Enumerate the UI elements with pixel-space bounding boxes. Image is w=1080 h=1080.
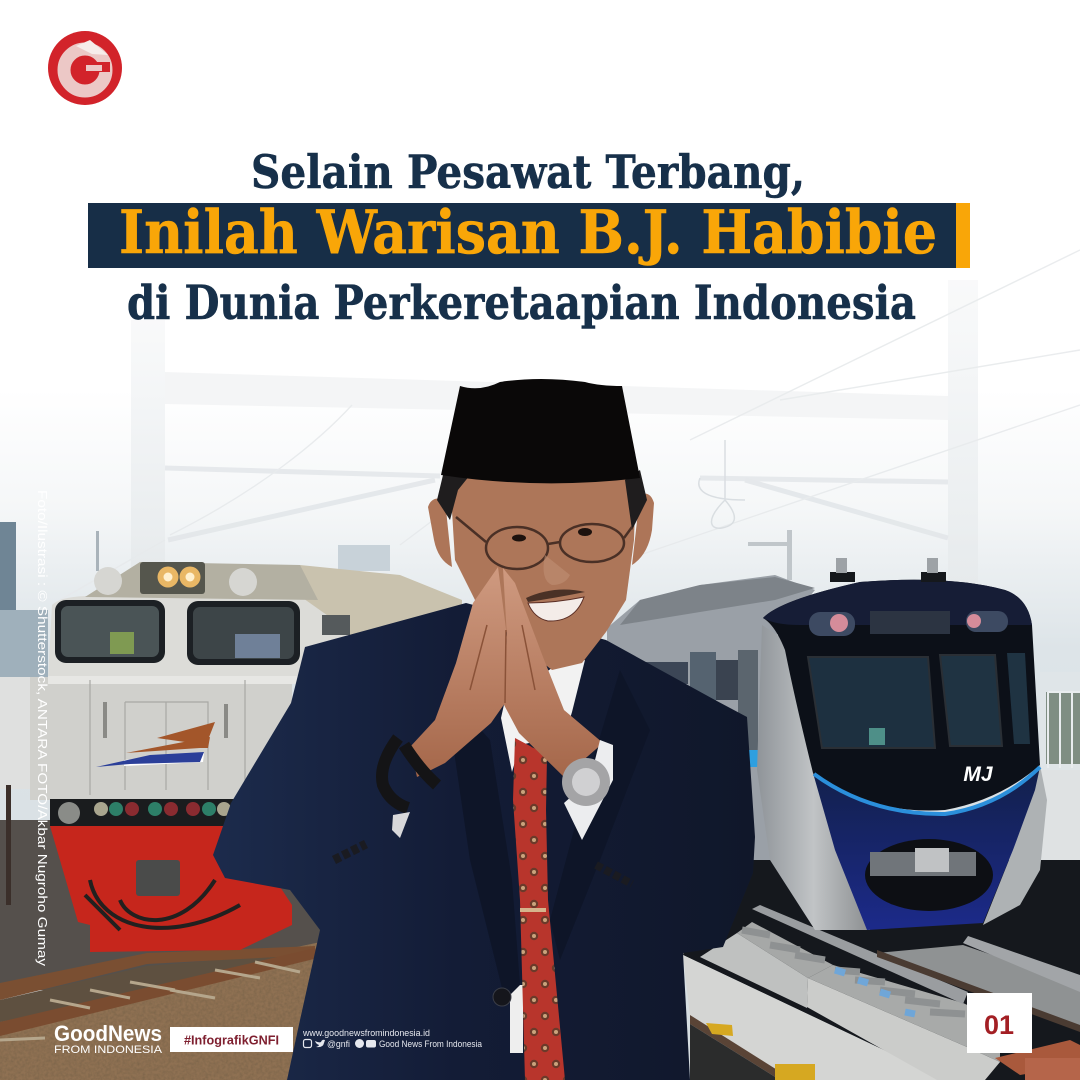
inner sleepers [877,945,1080,1030]
website and social handles: Good News From Indonesia [379,1039,483,1050]
right shirt cuff [564,740,613,840]
red pilot [50,826,292,952]
portrait of B.J. Habibie [213,379,755,1080]
necktie [513,738,565,1080]
left railway tracks [0,946,318,1040]
jacket [213,603,755,1080]
icon: youtube [366,1040,376,1048]
website and social handles: www.goodnewsfromindonesia.id [302,1028,430,1039]
red logo badge [48,31,122,105]
headlight housing [140,562,205,594]
From Indonesia wordmark: FROM INDONESIA [54,1044,163,1056]
horn dome left [94,567,122,595]
right cuff buttons [596,865,632,884]
right side platform and railing [1040,672,1080,865]
right hand [503,568,603,777]
hair [437,470,647,530]
left hand [410,567,507,777]
overhead catenary structure [60,250,1080,600]
jacket button [493,988,511,1006]
title highlight bar [88,203,956,268]
blue stripe [814,767,1040,814]
icon: twitter [315,1040,325,1047]
diesel locomotive [30,562,462,952]
photo credit: Foto/Ilustrasi : © Shutterstock, ANTARA FOTO/Akbar Nugroho Gumay [35,490,50,967]
title line one: Selain Pesawat Terbang, [251,145,805,199]
tie clip [520,908,546,912]
destination display [870,611,950,634]
run number [869,728,885,745]
cab window right [187,601,300,665]
left shirt cuff [392,812,410,838]
nose cap [763,580,1040,811]
face [450,478,636,670]
MRT logo: MJ [963,763,994,786]
pantograph nubs [830,558,946,582]
mustache [526,590,585,602]
light strip [50,799,245,826]
website and social handles [302,1028,483,1050]
coupler and hoses [85,860,240,930]
icon: facebook [355,1039,364,1048]
GoodNews wordmark: GoodNews [54,1021,162,1046]
coupler recess [865,839,993,911]
neck and ears [428,494,654,567]
wrist bands [382,738,437,808]
long hood [300,565,462,640]
page number: 01 [984,1010,1014,1040]
smile [528,597,584,621]
praying hands [410,567,603,777]
horn dome right [229,568,257,596]
hashtag tag [170,1027,293,1052]
concrete block two [807,978,1000,1080]
MRT metro train [607,558,1047,930]
cab window left [55,600,165,663]
concrete ground strip [683,955,947,1080]
nose panel [30,677,292,800]
lapels [445,670,650,1000]
hashtag tag: #InfografikGNFI [184,1032,279,1048]
title line two: Inilah Warisan B.J. Habibie [119,198,937,268]
head lamps [809,611,1008,636]
icon: instagram [304,1040,312,1048]
orange blocks [995,1040,1080,1075]
footer brand [54,1021,163,1056]
cab body [48,596,350,680]
signal post [6,785,11,905]
lower rail [690,1015,790,1080]
title accent bar [956,203,970,268]
train side car [607,575,815,860]
front windows [808,653,1030,748]
title block [88,145,970,331]
nose [544,555,570,585]
silver side skirt [757,625,870,930]
distant city buildings [0,522,792,677]
concrete block one [700,933,808,1008]
eyes [512,528,592,542]
left ground and ballast [0,820,330,1080]
side window [322,615,350,635]
sleepers [742,930,965,1014]
upper rails [752,905,968,1004]
left wall behind locomotive [0,677,45,789]
wristwatch [562,758,610,806]
shirt [501,660,585,772]
lower right track bed [683,860,1080,1080]
page number [967,993,1032,1053]
glasses [456,517,632,569]
title line three: di Dunia Perkeretaapian Indonesia [127,276,916,331]
left cuff buttons [334,844,366,860]
website and social handles: @gnfi [327,1039,350,1050]
peci hat [441,379,640,483]
railway livery logo [96,722,215,767]
blue lower nose [813,767,1040,930]
